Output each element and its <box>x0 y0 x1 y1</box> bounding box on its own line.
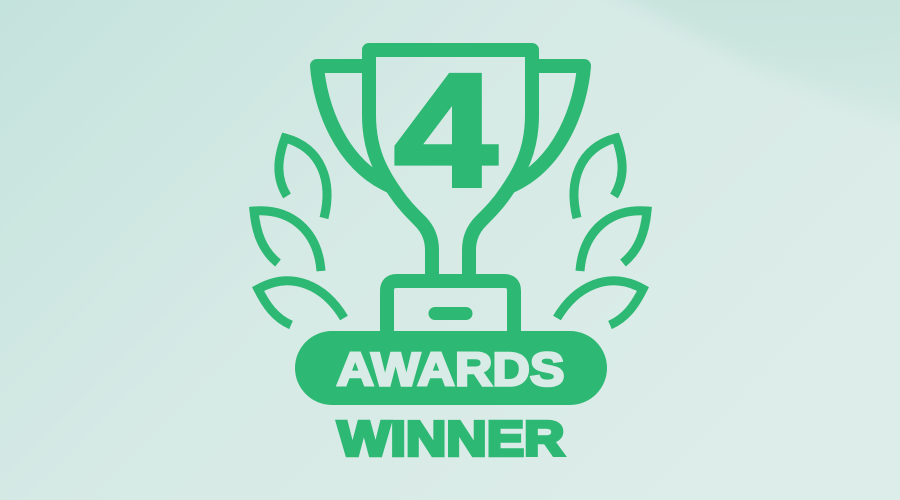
icon: left handle <box>317 66 392 187</box>
icon: base plaque slot <box>428 307 472 320</box>
numeral 4: 4 <box>394 41 497 220</box>
icon: left laurel leaves <box>254 138 344 325</box>
icon: trophy cup <box>369 50 532 281</box>
winner label: WINNER <box>338 412 564 466</box>
icon: right laurel leaves <box>557 138 647 325</box>
awards banner <box>295 331 607 405</box>
icon: right handle <box>509 66 584 187</box>
banner text: AWARDS <box>336 343 564 396</box>
trophy emblem <box>254 50 647 335</box>
icon: trophy base <box>387 281 514 335</box>
